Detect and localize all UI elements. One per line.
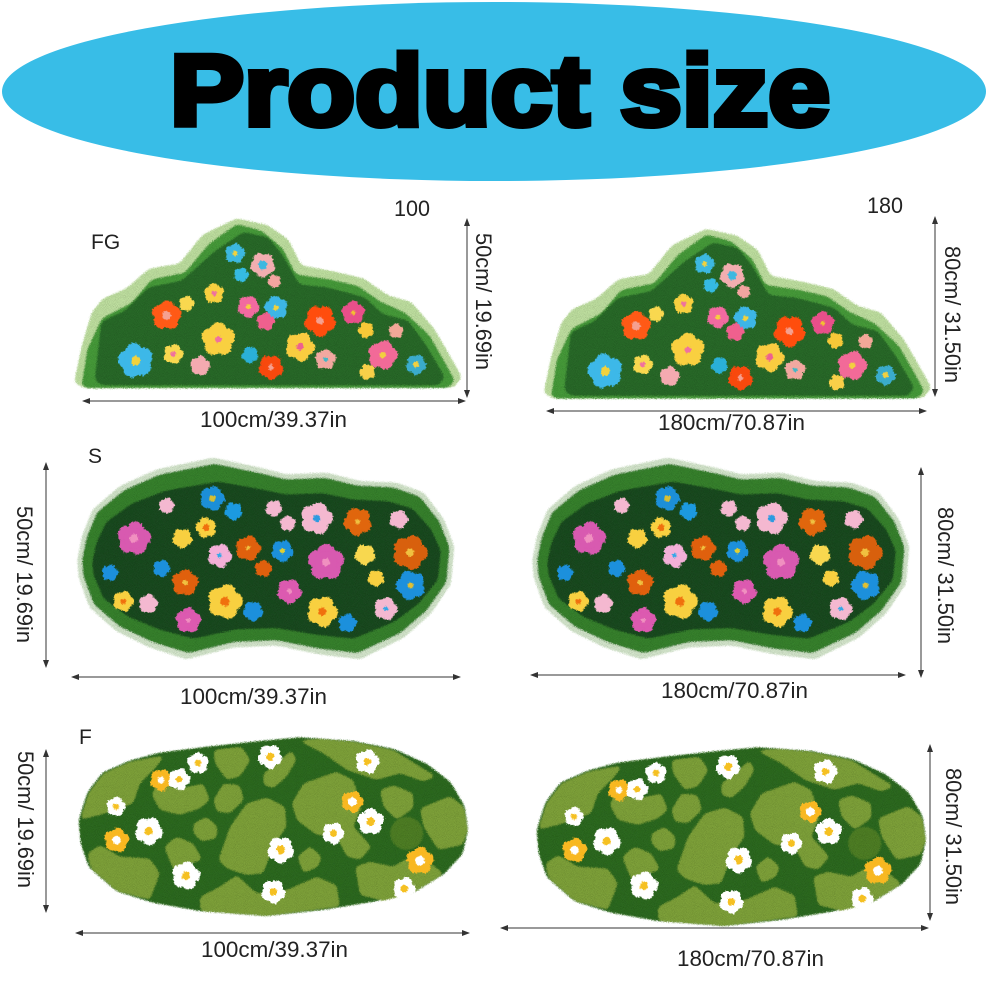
- title banner: [2, 2, 986, 181]
- height label: 50cm/ 19.69in: [471, 233, 496, 370]
- arrow: width: [72, 676, 460, 678]
- label: S: S: [88, 445, 102, 468]
- width label: 180cm/70.87in: [661, 678, 808, 703]
- arrow: height: [929, 745, 931, 920]
- height label: 80cm/ 31.50in: [940, 246, 965, 383]
- height label: 80cm/ 31.50in: [941, 768, 966, 905]
- width label: 180cm/70.87in: [677, 946, 824, 971]
- panel: S 100cm rug: [12, 445, 460, 709]
- arrow: width: [501, 927, 928, 929]
- arrow: height: [45, 750, 47, 912]
- rug: S 100: [77, 458, 454, 659]
- panel: FG 100cm rug: [74, 196, 496, 432]
- width label: 180cm/70.87in: [658, 410, 805, 435]
- panel: FG 180cm rug: [543, 193, 965, 435]
- height label: 50cm/ 19.69in: [12, 506, 37, 643]
- arrow: width: [531, 674, 905, 676]
- rug: S 180: [532, 458, 909, 659]
- arrow: height: [934, 217, 936, 396]
- arrow: height: [920, 468, 922, 677]
- label: FG: FG: [91, 231, 120, 254]
- width label: 100cm/39.37in: [200, 407, 347, 432]
- panel: S 180cm rug: [531, 458, 958, 703]
- arrow: height: [45, 463, 47, 667]
- rug: FG 180: [543, 229, 931, 399]
- panel: F 100cm rug: [13, 726, 469, 962]
- label: 100: 100: [394, 196, 430, 221]
- arrow: width: [76, 932, 469, 934]
- label: F: F: [79, 726, 92, 749]
- arrow: width: [83, 400, 465, 402]
- label: 180: 180: [867, 193, 903, 218]
- rug: F 100: [79, 737, 468, 916]
- height label: 80cm/ 31.50in: [933, 507, 958, 644]
- rug: FG 100: [74, 218, 462, 388]
- width label: 100cm/39.37in: [201, 937, 348, 962]
- panel: F 180cm rug: [501, 745, 966, 971]
- height label: 50cm/ 19.69in: [13, 751, 38, 888]
- width label: 100cm/39.37in: [180, 684, 327, 709]
- title: Product size: [170, 35, 830, 147]
- rug: F 180: [537, 747, 926, 926]
- arrow: height: [466, 219, 468, 397]
- arrow: width: [547, 410, 926, 412]
